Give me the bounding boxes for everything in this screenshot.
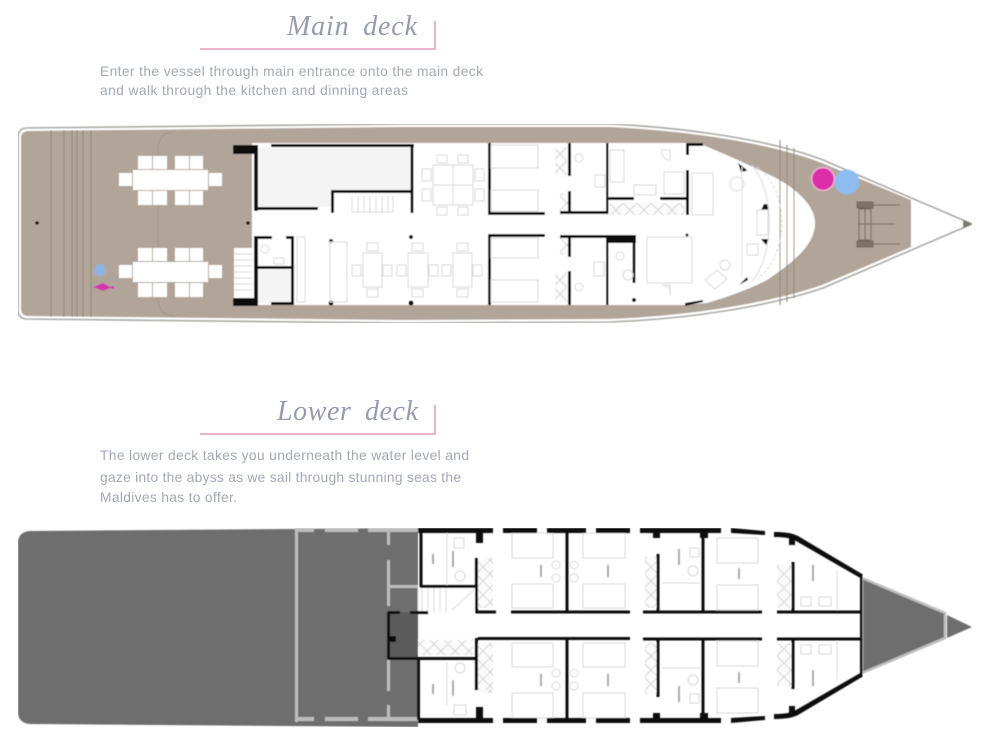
bow tip [963,220,972,228]
icon: pink fish marker [93,283,114,291]
cabin storage hatching [555,147,685,302]
aft hull area [18,528,418,727]
outdoor table: lower [119,248,222,297]
wheelhouse furniture [705,165,782,289]
cabin beds [491,145,713,302]
structural walls [35,143,769,306]
cabins: starboard side [478,638,862,723]
stairwell landing [390,612,418,658]
icon: blue circle [834,170,860,194]
stairs: kitchen [352,196,393,212]
dining tables: saloon [261,237,482,302]
cabins: port side [478,528,862,614]
lower stairs [418,586,476,612]
main deck plan [18,124,972,323]
heading: main deck: Main deck [286,11,418,42]
bow deck triangle [862,578,945,673]
light structural strips [295,528,418,722]
icon: small blue marker [94,264,106,276]
text: lower deck description: The lower deck takes you underneath the water level and [100,448,469,463]
text: main deck description: and walk through the kitchen and dinning areas [100,83,408,98]
dining table: four-seat [422,155,484,215]
text: lower deck description: Maldives has to offer. [100,490,237,505]
heading: lower deck: Lower deck [276,396,419,427]
interior white area [252,143,815,305]
hull outline [18,124,972,323]
text: lower deck description [100,448,469,505]
icon: pink circle [812,168,834,190]
heading: main deck [200,11,435,49]
stairs: entry [234,248,252,298]
outdoor table: upper [119,156,222,205]
washroom room fill [258,270,291,303]
deck lines [51,130,794,317]
lower deck plan [18,528,972,727]
aft cabin walls [387,528,630,723]
text: main deck description: Enter the vessel through main entrance onto the main deck [100,64,483,79]
heading: lower deck [200,396,435,434]
aft cabin fixtures [418,533,493,715]
kitchen room fill [258,147,411,207]
bow tip [947,615,972,638]
anchor winch [857,202,900,247]
text: lower deck description: gaze into the abyss as we sail through stunning seas the [100,470,461,485]
deck surface [21,127,911,320]
forward end wall [860,574,862,677]
text: main deck description [100,64,483,98]
